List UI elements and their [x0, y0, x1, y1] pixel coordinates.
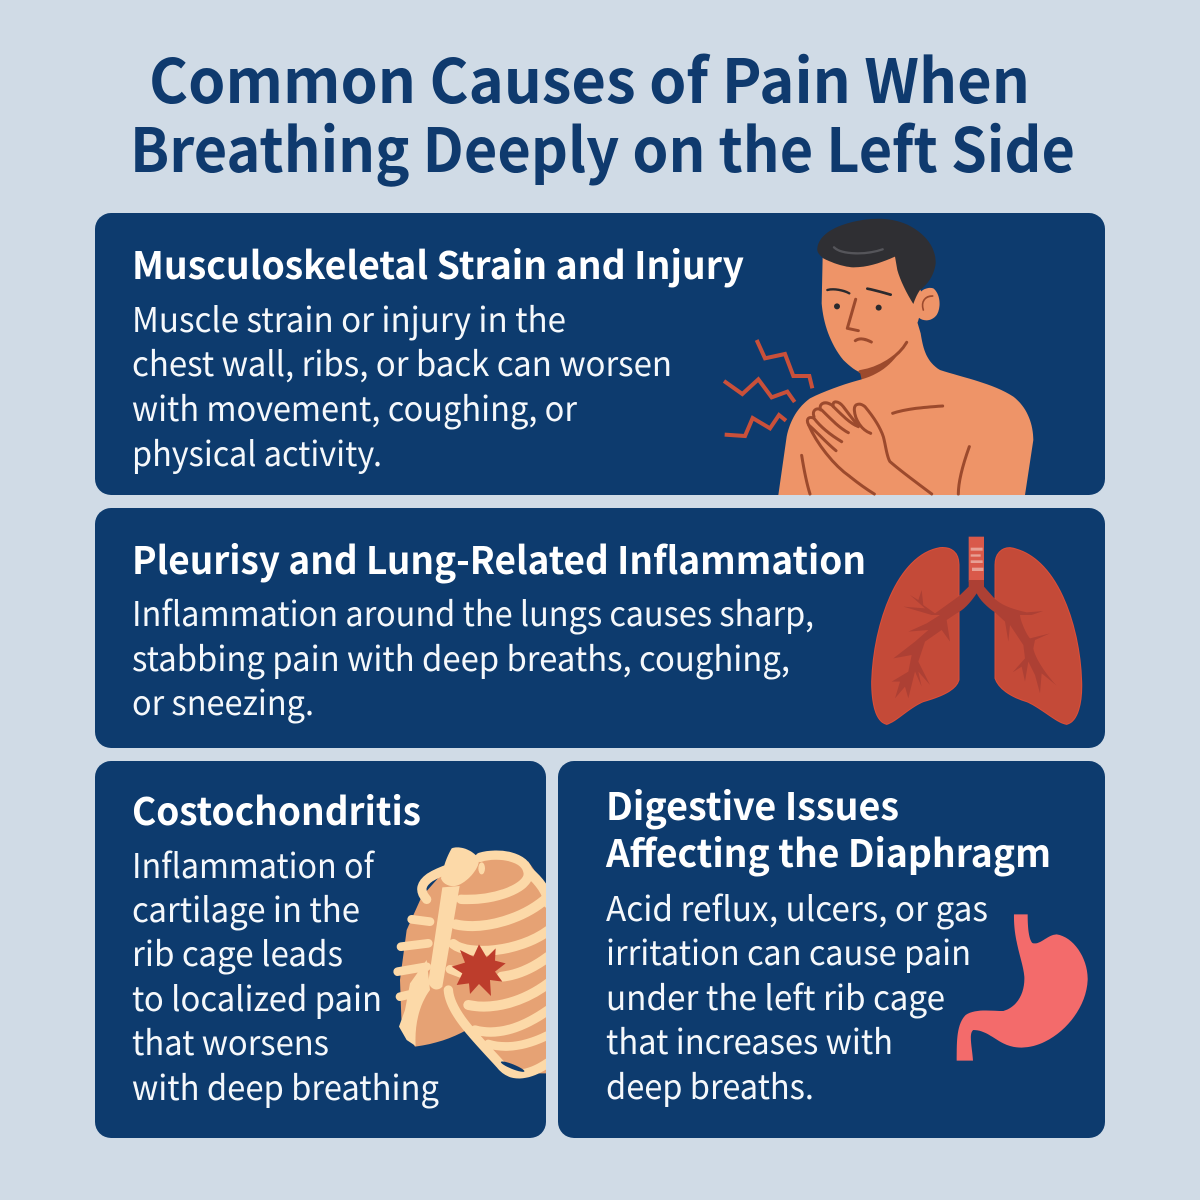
title: Breathing Deeply on the Left Side: [130, 101, 1075, 190]
text block: costochondritis description: to localized pain: [132, 972, 382, 1021]
text block: musculoskeletal description: physical activity.: [132, 427, 382, 476]
panel: pleurisy: [95, 508, 1105, 748]
panel: musculoskeletal strain: [95, 213, 1105, 495]
text block: costochondritis description: Inflammation of: [132, 839, 376, 888]
title: [130, 32, 1075, 190]
text block: digestive description: irritation can cause pain: [606, 926, 971, 975]
panel: digestive issues: [558, 761, 1105, 1138]
heading: costochondritis: Costochondritis: [132, 781, 421, 836]
text block: costochondritis description: that worsens: [132, 1016, 329, 1065]
heading: musculoskeletal strain: Musculoskeletal Strain and Injury: [132, 235, 744, 290]
text block: digestive description: under the left rib cage: [606, 971, 945, 1020]
text block: pleurisy description: Inflammation around the lungs causes sharp,: [132, 587, 814, 636]
text block: digestive description: [606, 882, 988, 1109]
text block: musculoskeletal description: Muscle strain or injury in the: [132, 293, 566, 342]
icon: rib cage with pain star: [398, 847, 548, 1074]
text block: pleurisy description: stabbing pain with deep breaths, coughing,: [132, 632, 790, 681]
text block: pleurisy description: [132, 587, 814, 725]
text block: costochondritis description: with deep breathing: [132, 1061, 439, 1110]
text block: musculoskeletal description: [132, 293, 672, 476]
title: Common Causes of Pain When: [149, 32, 1030, 121]
icon: man holding shoulder in pain: [724, 219, 1033, 495]
text block: costochondritis description: cartilage in the: [132, 883, 360, 932]
text block: pleurisy description: or sneezing.: [132, 676, 314, 725]
panel: costochondritis: [95, 761, 548, 1138]
heading: digestive issues: Affecting the Diaphragm: [605, 823, 1051, 878]
text block: digestive description: deep breaths.: [606, 1060, 814, 1109]
icon: stomach: [957, 914, 1088, 1061]
heading: digestive issues: [605, 776, 1051, 878]
text block: digestive description: Acid reflux, ulcers, or gas: [606, 882, 988, 931]
text block: musculoskeletal description: with movement, coughing, or: [132, 382, 578, 431]
text block: costochondritis description: rib cage leads: [132, 927, 343, 976]
text block: digestive description: that increases with: [606, 1015, 893, 1064]
text block: costochondritis description: [132, 839, 439, 1110]
icon: lungs: [872, 537, 1082, 724]
heading: pleurisy: Pleurisy and Lung-Related Inflammation: [132, 530, 866, 585]
text block: musculoskeletal description: chest wall, ribs, or back can worsen: [132, 337, 672, 386]
heading: digestive issues: Digestive Issues: [606, 776, 899, 831]
